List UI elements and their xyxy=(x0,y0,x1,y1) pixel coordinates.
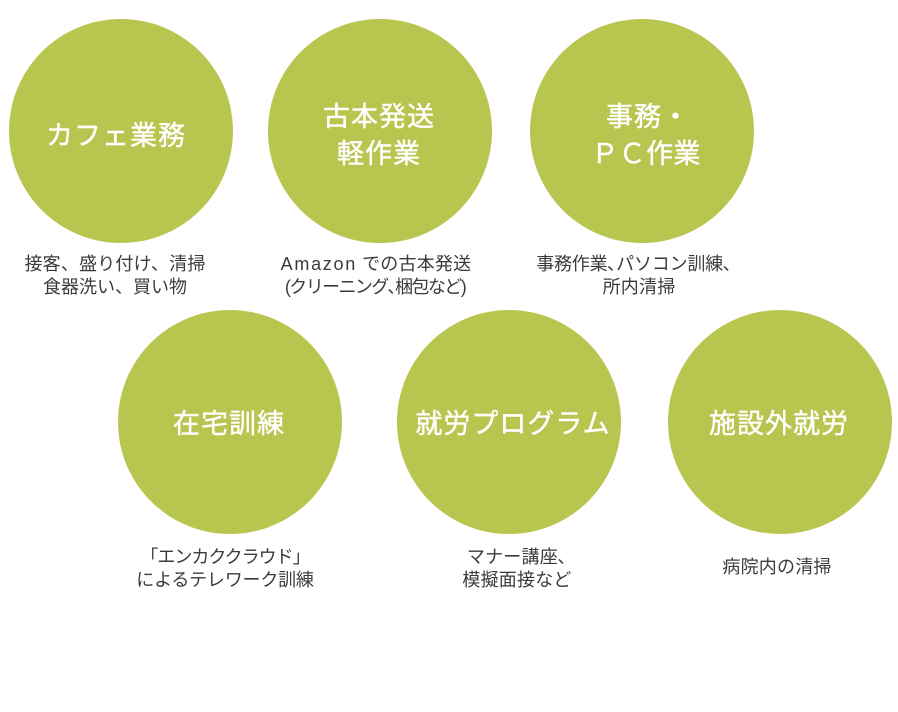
description: employment program: 模擬面接など xyxy=(462,570,572,590)
heading: off-site work: 施設外就労 xyxy=(709,409,849,439)
panel: cafe work xyxy=(9,19,233,297)
description: home training: によるテレワーク訓練 xyxy=(136,570,314,590)
description: office work: 事務作業､パソコン訓練､ xyxy=(536,254,732,274)
heading: office work xyxy=(591,102,701,169)
description: employment program xyxy=(462,547,572,590)
circle: used book shipping xyxy=(268,19,492,243)
description: cafe work: 食器洗い、買い物 xyxy=(43,277,187,297)
heading: employment program: 就労プログラム xyxy=(415,409,611,439)
circle: office work xyxy=(530,19,754,243)
description: cafe work: 接客、盛り付け、清掃 xyxy=(24,254,206,274)
description: employment program: マナー講座､ xyxy=(467,547,567,567)
heading: office work: 事務・ xyxy=(606,102,690,132)
description: office work: 所内清掃 xyxy=(603,277,675,297)
description: office work xyxy=(536,254,732,297)
circle: off-site work xyxy=(668,310,892,534)
description: off-site work: 病院内の清掃 xyxy=(722,557,832,577)
heading: home training: 在宅訓練 xyxy=(173,409,285,439)
description: used book shipping: (クリーニング､梱包など) xyxy=(285,277,465,297)
panel: office work xyxy=(530,19,754,297)
heading: used book shipping xyxy=(323,102,435,169)
description: used book shipping xyxy=(280,254,471,297)
panel: home training xyxy=(118,310,342,590)
heading: office work: ＰＣ作業 xyxy=(591,139,701,169)
heading: used book shipping: 軽作業 xyxy=(337,139,421,169)
heading: used book shipping: 古本発送 xyxy=(323,102,435,132)
heading: cafe work: カフェ業務 xyxy=(46,121,186,151)
circle: cafe work xyxy=(8,19,232,243)
panel: employment program xyxy=(397,310,621,590)
description: home training: 「エンカククラウド」 xyxy=(140,547,310,567)
panel: used book shipping xyxy=(268,19,492,297)
circle: home training xyxy=(118,310,342,534)
description: home training xyxy=(136,547,314,590)
description: used book shipping: Amazon での古本発送 xyxy=(281,254,471,274)
circle: employment program xyxy=(396,310,620,534)
description: cafe work xyxy=(24,254,206,297)
